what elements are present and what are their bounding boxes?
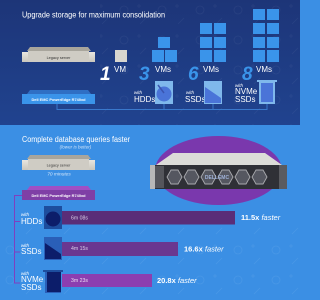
legacy server: Legacy server: [47, 56, 71, 60]
label: with SSDs: with: [186, 90, 194, 95]
Dell server: [22, 90, 95, 104]
row: NVMe SSDs: SSDs: [21, 283, 41, 292]
icon: NVMe SSD: [257, 81, 277, 104]
row: NVMe SSDs: 3m 23s: [71, 278, 88, 284]
row: HDDs: with: [21, 212, 29, 217]
label: with HDDs: with: [134, 90, 142, 95]
row: NVMe SSDs: with: [21, 271, 29, 276]
label: with NVMe SSDs: NVMe: [235, 87, 258, 96]
row: SSDs: 16.6x faster: [184, 244, 224, 254]
note: lower is better: (lower is better): [60, 144, 92, 150]
panel: database queries: [0, 125, 300, 300]
row: HDDs: HDDs: [21, 217, 42, 226]
8 VMs: VMs: [256, 65, 272, 74]
1 VM: [100, 50, 127, 85]
6 VMs: VMs: [203, 65, 219, 74]
connector lines: [57, 103, 267, 110]
heading: complete queries: Complete database queries faster: [22, 135, 130, 144]
row: SSDs: [21, 237, 224, 260]
row: NVMe SSDs: NVMe: [21, 275, 44, 284]
row: HDDs: 6m 08s: [71, 216, 88, 222]
Dell server: Dell EMC PowerEdge R740xd: [31, 97, 86, 102]
label: with NVMe SSDs: with: [235, 83, 243, 88]
row: SSDs: with: [21, 243, 29, 248]
row: HDDs: [21, 206, 281, 229]
legacy server: [22, 155, 95, 170]
label: 70 minutes: 70 minutes: [47, 172, 71, 178]
row: NVMe SSDs: [21, 271, 197, 293]
6 VMs: 6: [188, 64, 199, 85]
label: with SSDs: SSDs: [185, 95, 205, 104]
3 VMs: [139, 37, 177, 85]
6 VMs: [188, 23, 226, 85]
3 VMs: 3: [139, 64, 150, 85]
Dell server: [22, 186, 95, 200]
label: with HDDs: HDDs: [134, 95, 155, 104]
8 VMs: 8: [242, 64, 253, 85]
row: SSDs: 4m 15s: [71, 246, 88, 252]
icon: HDD: [155, 81, 173, 104]
1 VM: VM: [114, 65, 126, 74]
hero image: server on ellipse: DELLEMC: [205, 175, 229, 181]
Dell server: Dell EMC PowerEdge R740xd: [31, 193, 86, 198]
3 VMs: VMs: [155, 65, 171, 74]
heading: upgrade storage: Upgrade storage for maximum consolidation: [22, 10, 165, 20]
connector lines: [14, 196, 22, 283]
legacy server: Legacy server: [47, 163, 71, 167]
legacy server: [22, 47, 95, 62]
hero image: server on ellipse: [150, 136, 287, 205]
row: NVMe SSDs: 20.8x faster: [157, 276, 197, 285]
label: with NVMe SSDs: SSDs: [235, 95, 255, 104]
row: SSDs: SSDs: [21, 247, 41, 256]
row: HDDs: 11.5x faster: [241, 213, 281, 222]
icon: SSD: [204, 81, 222, 104]
panel: storage consolidation: [0, 0, 300, 125]
8 VMs: [242, 9, 279, 85]
1 VM: 1: [100, 64, 111, 85]
